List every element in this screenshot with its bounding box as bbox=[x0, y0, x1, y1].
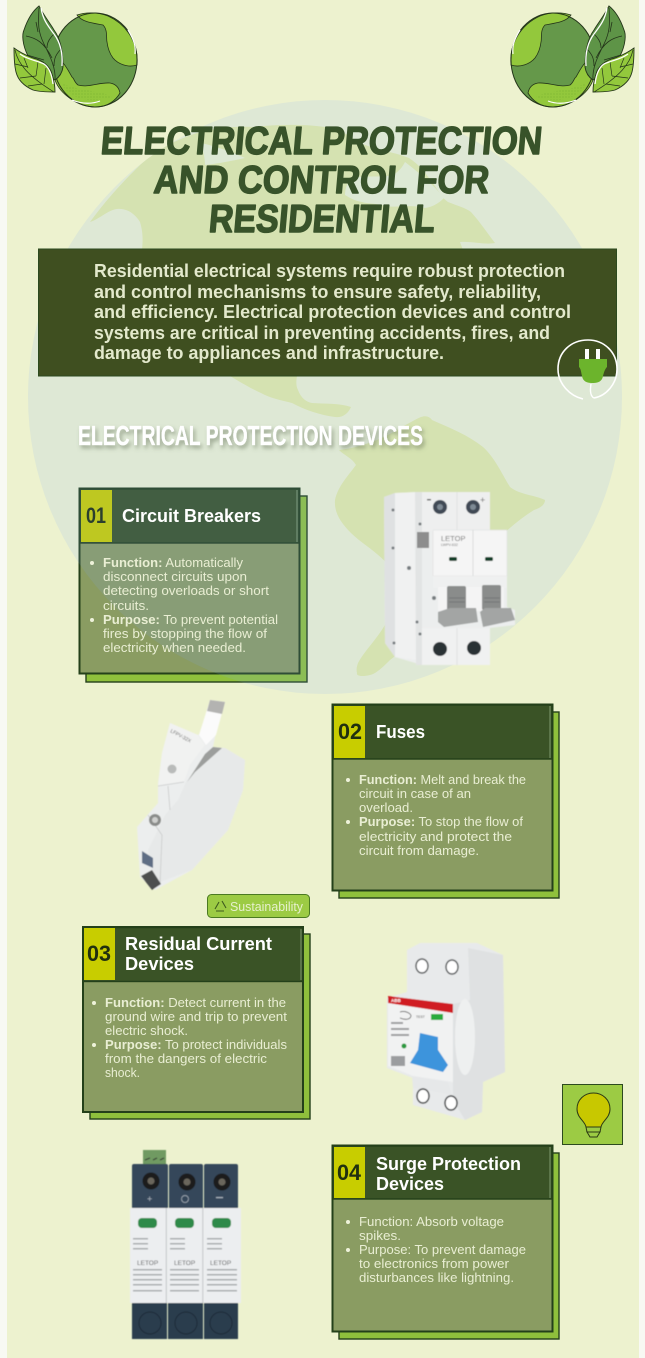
card 02 heading: Fuses bbox=[376, 722, 425, 742]
icon: plug bbox=[558, 340, 617, 399]
card 03 list: Purpose: To protect individuals bbox=[105, 1037, 287, 1052]
intro box bbox=[38, 249, 616, 376]
title: ELECTRICAL PROTECTION bbox=[99, 120, 544, 163]
tag: Sustainability: Sustainability bbox=[230, 899, 303, 914]
card 04: Surge Protection Devices bbox=[332, 1146, 559, 1339]
icon: earth with leaves, right bbox=[511, 6, 634, 107]
card 01 list: circuits. bbox=[103, 598, 149, 613]
card 04 heading: Surge Protection bbox=[376, 1154, 521, 1174]
product: surge protection device bbox=[130, 1150, 241, 1339]
icon: recycle bbox=[215, 901, 226, 911]
card 03 list: shock. bbox=[105, 1065, 140, 1080]
product: residual current device: ABB bbox=[391, 998, 401, 1003]
card 01 list bbox=[90, 555, 278, 655]
title: RESIDENTIAL bbox=[207, 198, 437, 241]
intro box: Residential electrical systems require robust protection bbox=[94, 261, 565, 281]
card 04 list: Purpose: To prevent damage bbox=[359, 1242, 526, 1257]
card 02 number: 02 bbox=[338, 719, 362, 744]
card 03 list: Function: Detect current in the bbox=[105, 995, 286, 1010]
product: circuit breaker: + bbox=[480, 495, 485, 505]
product: surge protection device: LETOP bbox=[174, 1260, 195, 1267]
card 03 heading: Devices bbox=[125, 954, 194, 974]
card 04 list: to electronics from power bbox=[359, 1256, 510, 1271]
card 04 list: Function: Absorb voltage bbox=[359, 1214, 504, 1229]
card 02 list: electricity and protect the bbox=[359, 829, 512, 844]
card 04 list: spikes. bbox=[359, 1228, 401, 1243]
card 02 list: circuit in case of an bbox=[359, 786, 471, 801]
section heading: ELECTRICAL PROTECTION DEVICES bbox=[78, 420, 423, 451]
card 03 list: electric shock. bbox=[105, 1023, 188, 1038]
tag: Sustainability bbox=[208, 894, 310, 918]
card 04 list bbox=[346, 1214, 526, 1285]
card 01 heading: Circuit Breakers bbox=[122, 506, 261, 526]
product: circuit breaker: LETOP bbox=[441, 534, 465, 543]
background globe bbox=[28, 100, 622, 694]
card 01 number: 01 bbox=[86, 503, 106, 528]
card 01 list: electricity when needed. bbox=[103, 640, 246, 655]
intro box: and control mechanisms to ensure safety, reliability, bbox=[94, 282, 541, 302]
product: surge protection device: LETOP bbox=[137, 1260, 158, 1267]
product: residual current device: TEST bbox=[416, 1015, 426, 1019]
card 03 number: 03 bbox=[87, 941, 111, 966]
card 03 list bbox=[92, 995, 287, 1080]
card 04 heading: Devices bbox=[376, 1174, 444, 1194]
product: surge protection device: + bbox=[147, 1194, 152, 1204]
product: fuse holder bbox=[137, 700, 245, 890]
title bbox=[99, 120, 544, 241]
product: circuit breaker bbox=[384, 492, 515, 665]
title: AND CONTROL FOR bbox=[152, 159, 491, 202]
card 04 list: disturbances like lightning. bbox=[359, 1270, 514, 1285]
card 03: Residual Current Devices bbox=[83, 927, 310, 1119]
card 03 list: from the dangers of electric bbox=[105, 1051, 267, 1066]
intro box: damage to appliances and infrastructure. bbox=[94, 343, 444, 363]
card 02: Fuses bbox=[332, 704, 559, 898]
card 01 list: detecting overloads or short bbox=[103, 583, 269, 598]
card 03 heading bbox=[125, 934, 272, 974]
product: fuse holder: LFPV-32X bbox=[169, 728, 193, 745]
card 04 number: 04 bbox=[337, 1160, 362, 1185]
intro box: and efficiency. Electrical protection devices and control bbox=[94, 302, 571, 322]
icon: light bulb bbox=[562, 1084, 622, 1144]
card 01 list: fires by stopping the flow of bbox=[103, 626, 267, 641]
card 01 list: disconnect circuits upon bbox=[103, 569, 247, 584]
card 01 list: Purpose: To prevent potential bbox=[103, 612, 278, 627]
ocean patches bbox=[201, 143, 444, 208]
intro box: systems are critical in preventing accidents, fires, and bbox=[94, 323, 550, 343]
card 02 list: Function: Melt and break the bbox=[359, 772, 526, 787]
card 03 heading: Residual Current bbox=[125, 934, 272, 954]
card 01 list: Function: Automatically bbox=[103, 555, 244, 570]
card 04 heading bbox=[376, 1154, 521, 1194]
card 02 list: circuit from damage. bbox=[359, 843, 479, 858]
card 02 list bbox=[346, 772, 526, 858]
card 01 text bbox=[90, 506, 278, 655]
product: surge protection device: LETOP bbox=[210, 1260, 231, 1267]
card 02 list: Purpose: To stop the flow of bbox=[359, 814, 523, 829]
product: circuit breaker: LWPV-632 bbox=[441, 543, 458, 547]
card 03 list: ground wire and trip to prevent bbox=[105, 1009, 287, 1024]
icon: earth with leaves, left bbox=[14, 6, 137, 107]
product: residual current device bbox=[387, 943, 505, 1120]
card 01: Circuit Breakers bbox=[80, 488, 307, 682]
card 02 list: overload. bbox=[359, 800, 413, 815]
